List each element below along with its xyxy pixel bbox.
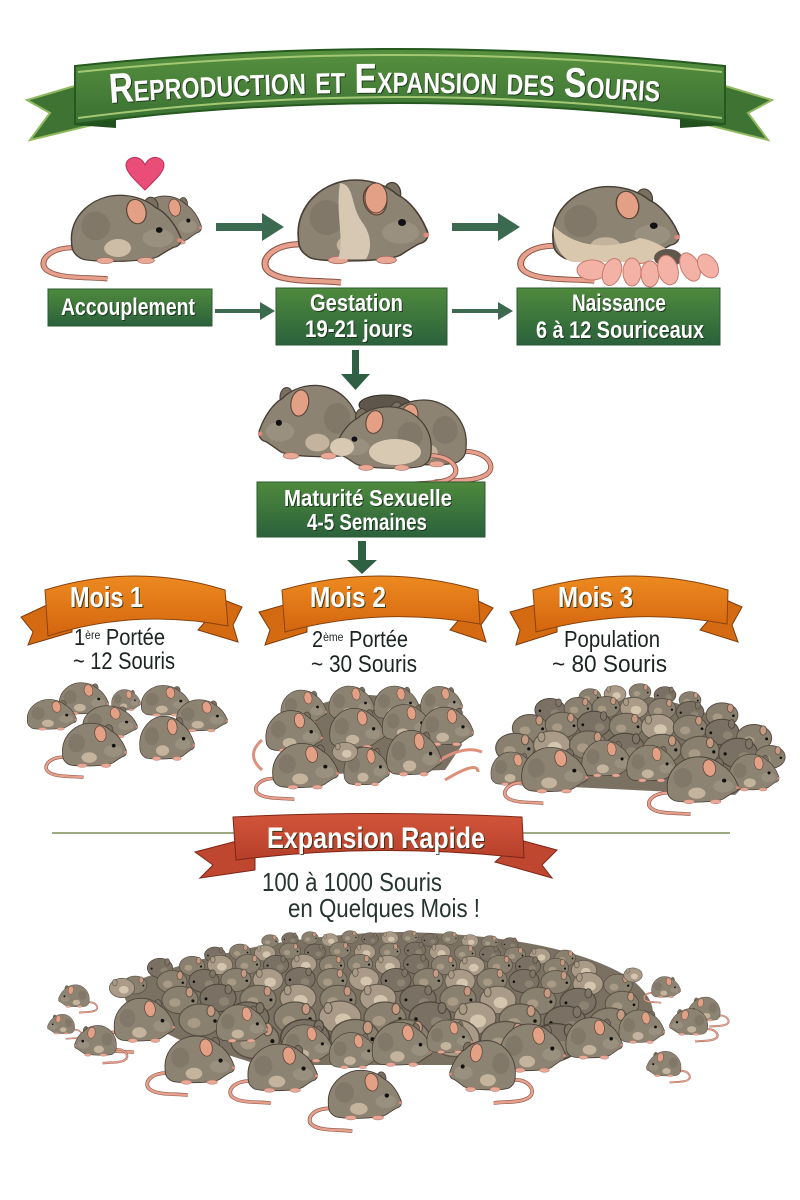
- box: accouplement: [48, 289, 212, 326]
- ribbon body: [75, 49, 725, 124]
- box: naissance: [517, 288, 720, 345]
- panel: mois 3: [491, 576, 785, 814]
- box: maturite: Maturité Sexuelle: [284, 485, 452, 511]
- icon: mating mice: [43, 195, 202, 279]
- mice cluster: [27, 683, 228, 777]
- divider line: [52, 832, 730, 834]
- arrow: [215, 302, 275, 320]
- panel: mois 2: [254, 576, 493, 799]
- banner mois 2: [259, 576, 493, 645]
- count: ~ 30 Souris: [311, 651, 417, 678]
- label: ème: [323, 630, 344, 644]
- box: gestation: Gestation: [310, 290, 403, 317]
- box: gestation: 19-21 jours: [305, 316, 413, 343]
- step: accouplement: [43, 157, 202, 279]
- expansion text: en Quelques Mois !: [288, 893, 480, 923]
- label: ère: [85, 628, 101, 642]
- box: maturite: 4-5 Semaines: [307, 509, 427, 535]
- arrow down: [347, 541, 377, 574]
- title banner: [24, 48, 774, 142]
- count: ~ 80 Souris: [552, 651, 667, 678]
- young mice group: [258, 385, 491, 485]
- banner mois 1: [21, 576, 242, 645]
- banner mois 1: Mois 1: [70, 582, 143, 614]
- count: ~ 12 Souris: [73, 648, 175, 675]
- step: gestation mouse: [265, 180, 429, 282]
- box: naissance: Naissance: [572, 290, 666, 317]
- banner: expansion rapide: Expansion Rapide: [267, 822, 485, 855]
- label: 2: [312, 626, 325, 652]
- arrow: [452, 302, 513, 320]
- box: accouplement: Accouplement: [61, 294, 195, 321]
- box: maturite: [257, 482, 485, 537]
- large mouse crowd: [47, 931, 729, 1131]
- step: naissance mother and pups: [521, 187, 723, 288]
- icon: heart: [126, 157, 164, 190]
- label: 1: [74, 624, 87, 650]
- title text: Reproduction et Expansion des Souris: [110, 64, 660, 104]
- icon: pink babies: [577, 250, 723, 288]
- mice cluster: [491, 684, 785, 814]
- label: Portée: [343, 626, 408, 652]
- expansion text: 100 à 1000 Souris: [262, 867, 442, 897]
- expansion text: [262, 867, 480, 923]
- label: Portée: [100, 624, 165, 650]
- box: naissance: 6 à 12 Souriceaux: [536, 317, 705, 344]
- banner mois 3: [510, 576, 742, 645]
- banner mois 2: Mois 2: [310, 582, 386, 614]
- arrow: [216, 213, 284, 241]
- arrow down: [341, 350, 370, 390]
- banner mois 3: Mois 3: [558, 582, 633, 614]
- mice cluster: [254, 686, 482, 799]
- ribbon tails: [27, 85, 772, 140]
- label: Population: [564, 626, 660, 652]
- box: gestation: [276, 288, 447, 345]
- banner: expansion rapide: [195, 814, 557, 878]
- arrow: [452, 213, 520, 241]
- panel: mois 1: [21, 576, 242, 777]
